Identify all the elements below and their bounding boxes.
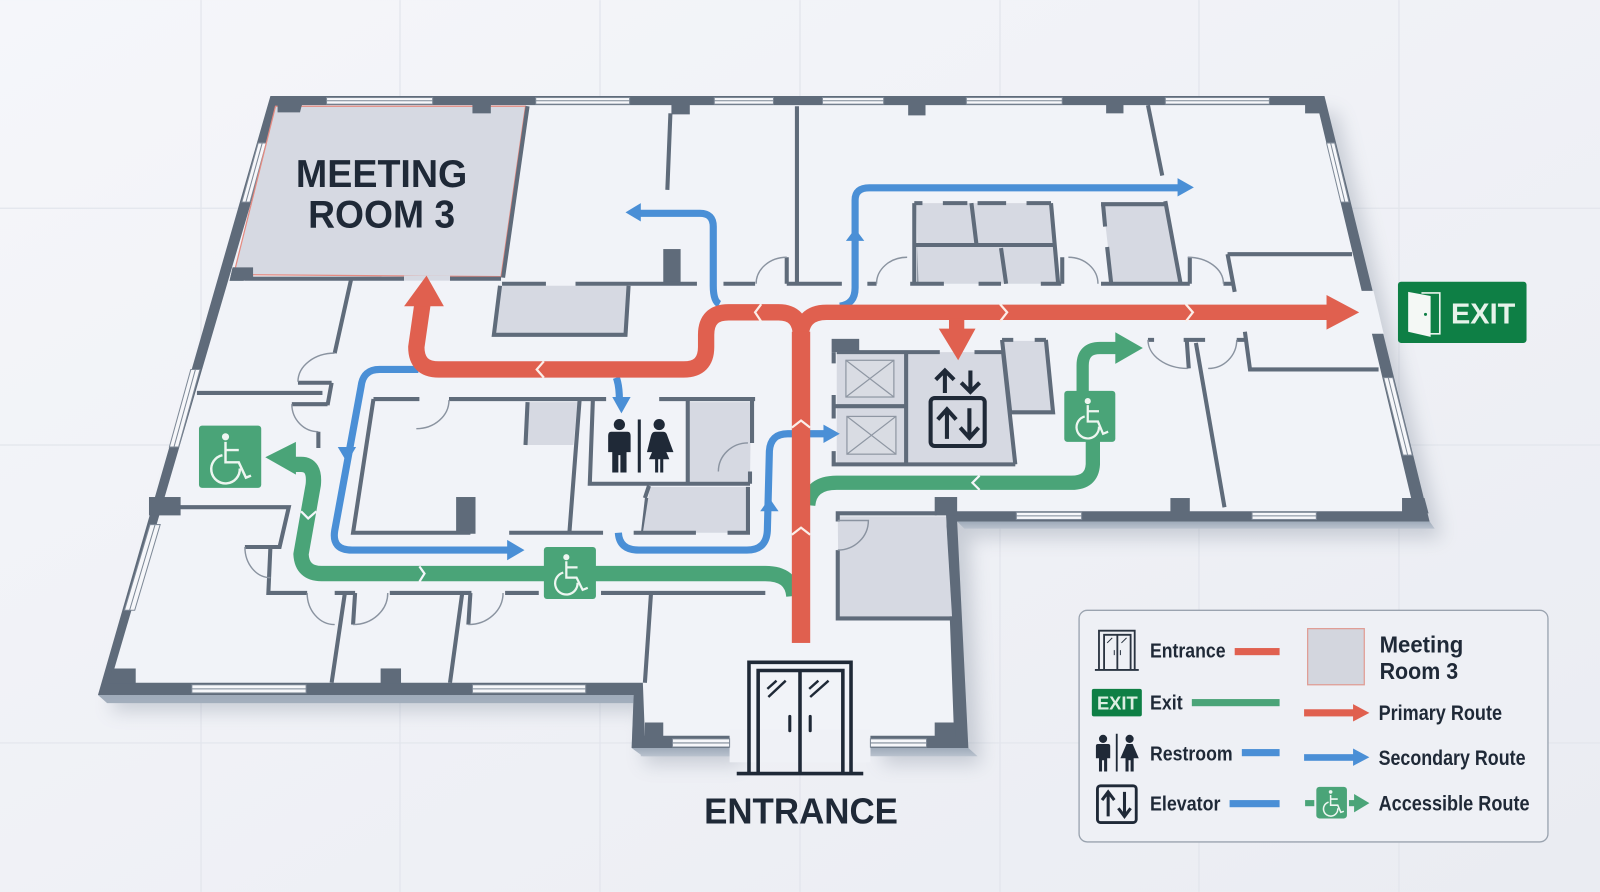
windows xyxy=(124,98,1412,747)
elevator cars xyxy=(846,360,896,454)
structural pillars xyxy=(108,104,1429,737)
sign: accessible left xyxy=(199,426,261,488)
legend: exit: EXIT xyxy=(1097,692,1138,713)
legend: primary route: Primary Route xyxy=(1379,702,1502,725)
legend: accessible route xyxy=(1305,787,1530,818)
exit sign xyxy=(1398,282,1527,343)
legend: elevator xyxy=(1097,786,1280,823)
legend: entrance xyxy=(1095,631,1280,670)
legend xyxy=(1079,610,1548,842)
legend: restroom xyxy=(1096,734,1280,772)
route: accessible green xyxy=(265,332,1143,596)
legend: elevator: Elevator xyxy=(1150,793,1220,815)
route: secondary blue xyxy=(334,178,1194,560)
legend: entrance: Entrance xyxy=(1150,641,1226,663)
floor plan xyxy=(98,96,1442,764)
meeting room label xyxy=(296,153,467,237)
legend: meeting room 3: Meeting xyxy=(1380,632,1463,658)
outer walls xyxy=(98,96,1430,748)
entrance opening xyxy=(730,730,870,762)
exit sign: EXIT xyxy=(1451,299,1516,331)
exit opening xyxy=(1361,291,1384,334)
icon: exit door xyxy=(1408,292,1440,337)
legend: secondary route: Secondary Route xyxy=(1379,747,1526,770)
interior walls xyxy=(179,105,1379,683)
legend: meeting room 3: Room 3 xyxy=(1380,658,1458,684)
route: primary red xyxy=(404,276,1359,643)
legend: exit: Exit xyxy=(1150,692,1183,714)
meeting room 3 xyxy=(230,104,528,281)
legend: meeting room 3 xyxy=(1308,629,1463,685)
icon: elevator arrows xyxy=(931,370,985,446)
legend: secondary route xyxy=(1304,747,1526,770)
icon: entrance doors xyxy=(737,662,863,774)
entrance label: ENTRANCE xyxy=(704,792,898,832)
floor xyxy=(110,105,1414,736)
gray rooms xyxy=(494,203,1181,616)
legend: accessible route: Accessible Route xyxy=(1379,792,1530,815)
legend: primary route xyxy=(1304,702,1502,725)
meeting room label: ROOM 3 xyxy=(308,194,455,237)
legend: exit xyxy=(1092,689,1280,716)
sign: accessible middle xyxy=(544,547,596,599)
meeting room label: MEETING xyxy=(296,153,467,196)
legend: restroom: Restroom xyxy=(1150,743,1233,765)
icon: restroom xyxy=(608,419,673,473)
door swings xyxy=(245,257,1237,625)
sign: accessible right xyxy=(1064,391,1115,442)
